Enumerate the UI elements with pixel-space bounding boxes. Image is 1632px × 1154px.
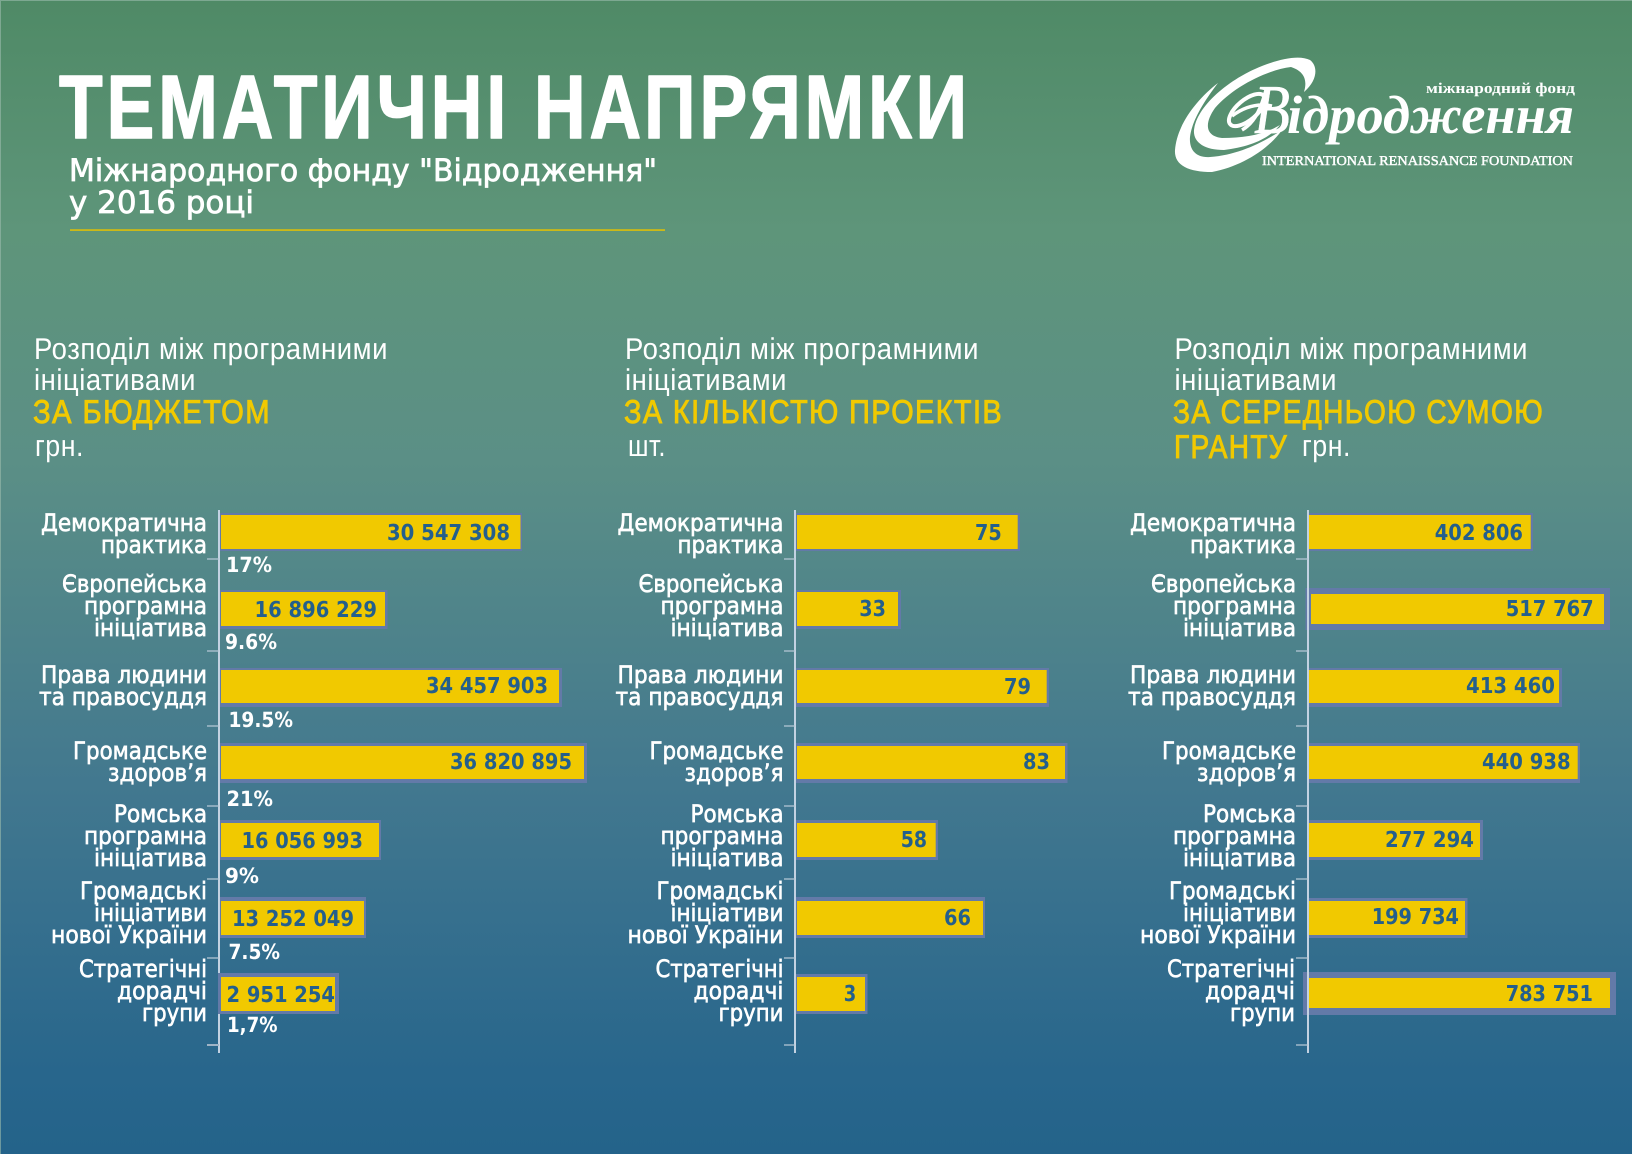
row: Громадські ініціативи нової України: нової України [51,921,207,949]
bar highlight backing: strategic groups [1303,972,1616,1015]
row: Ромська програмна ініціатива: ініціатива [670,844,784,872]
logo: International Renaissance Foundation: ідродження [1287,85,1574,145]
row: Стратегічні дорадчі групи: 3 [844,982,856,1007]
title: ТЕМАТИЧНІ НАПРЯМКИ [59,58,971,158]
row: Демократична практика [1130,509,1533,559]
row: Європейська програмна ініціатива: програмна [1173,592,1296,620]
heading: average grant: ініціативами [1174,364,1337,397]
row: Права людини та правосуддя: та правосуддя [39,683,207,711]
row: Стратегічні дорадчі групи: Стратегічні [656,955,784,983]
row: Громадські ініціативи нової України: ініціативи [94,899,207,927]
row: Європейська програмна ініціатива [638,570,901,642]
row: Ромська програмна ініціатива: 9% [225,864,259,888]
row: Права людини та правосуддя: 34 457 903 [426,674,548,699]
row: Європейська програмна ініціатива: Європейська [1151,570,1296,598]
row: Громадське здоров'я: 83 [1023,750,1050,775]
row: Громадське здоров'я: 21% [226,787,273,811]
row: Ромська програмна ініціатива [1173,800,1483,872]
row: Європейська програмна ініціатива [1151,570,1604,642]
row: Громадське здоров'я [73,737,587,811]
logo: International Renaissance Foundation: міжнародний фонд [1426,81,1575,97]
row: Ромська програмна ініціатива [660,800,938,872]
row: Громадські ініціативи нової України [51,877,366,964]
row: Демократична практика [618,509,1020,559]
row: Європейська програмна ініціатива [62,570,388,654]
panel: project count distribution [616,333,1068,1053]
heading: project count: ЗА КІЛЬКІСТЮ ПРОЕКТІВ [624,393,1003,430]
row: Стратегічні дорадчі групи: Стратегічні [1167,955,1295,983]
logo: International Renaissance Foundation: INTERNATIONAL RENAISSANCE FOUNDATION [1262,153,1573,168]
row: Ромська програмна ініціатива: Ромська [114,800,207,828]
heading: average grant: Розподіл між програмними [1174,333,1528,366]
row: Стратегічні дорадчі групи: дорадчі [694,977,784,1005]
heading: budget: ініціативами [34,364,196,397]
row: Стратегічні дорадчі групи [656,955,868,1027]
row: Демократична практика [41,509,522,577]
row: Громадські ініціативи нової України: 199 734 [1372,905,1459,930]
row: Демократична практика: Демократична [41,509,207,537]
heading: average grant [1173,333,1544,465]
row: Ромська програмна ініціатива: програмна [84,822,207,850]
row: Громадське здоров'я: здоров’я [684,759,784,787]
row: Ромська програмна ініціатива: Ромська [690,800,784,828]
row: Громадське здоров'я [1162,737,1580,787]
row: Демократична практика: 17% [226,553,272,577]
row: Громадське здоров'я [650,737,1068,787]
heading: average grant: грн. [1302,430,1351,463]
heading: budget: ЗА БЮДЖЕТОМ [33,393,271,430]
row: Стратегічні дорадчі групи: 1,7% [227,1013,278,1037]
row: Громадські ініціативи нової України: нової України [628,921,784,949]
row: Громадські ініціативи нової України: Громадські [80,877,207,905]
row: Демократична практика: Демократична [1130,509,1296,537]
row: Громадське здоров'я: 36 820 895 [450,750,572,775]
heading: average grant: ЗА СЕРЕДНЬОЮ СУМОЮ [1173,393,1544,430]
row: Громадські ініціативи нової України [1140,877,1468,949]
row: Громадські ініціативи нової України: 7.5% [228,940,280,964]
row: Права людини та правосуддя [1128,661,1562,711]
row: Європейська програмна ініціатива: 33 [859,597,886,622]
heading: project count: шт. [628,430,666,463]
heading: budget: Розподіл між програмними [34,333,388,366]
row: Демократична практика: практика [1190,531,1296,559]
row: Ромська програмна ініціатива: 58 [901,828,927,853]
row: Стратегічні дорадчі групи [1167,955,1610,1027]
row: Демократична практика: практика [101,531,207,559]
row: Ромська програмна ініціатива [84,800,381,888]
row: Стратегічні дорадчі групи: дорадчі [1205,977,1295,1005]
logo: International Renaissance Foundation: В [1254,72,1290,149]
heading: project count: Розподіл між програмними [625,333,979,366]
row: Демократична практика: 75 [975,521,1002,546]
row: Громадські ініціативи нової України: нової України [1140,921,1296,949]
heading: budget: грн. [35,430,84,463]
row: Європейська програмна ініціатива: 16 896 229 [254,598,377,623]
row: Громадські ініціативи нової України: 66 [944,906,971,931]
subtitle: у 2016 році [69,185,254,221]
row: Громадське здоров'я: Громадське [73,737,207,765]
logo: International Renaissance Foundation [1175,58,1575,172]
row: Права людини та правосуддя [39,661,562,732]
row: Громадські ініціативи нової України: 13 252 049 [232,907,354,932]
chart axis: budget [218,510,220,1053]
heading: average grant: ГРАНТУ [1174,428,1288,465]
row: Права людини та правосуддя: 413 460 [1466,674,1555,699]
row: Громадські ініціативи нової України: ініціативи [670,899,784,927]
row: Демократична практика: Демократична [618,509,784,537]
row: Стратегічні дорадчі групи: Стратегічні [79,955,207,983]
panel: budget distribution [33,333,587,1053]
row: Громадське здоров'я: Громадське [650,737,784,765]
row: Права людини та правосуддя: Права людини [1130,661,1296,689]
row: Європейська програмна ініціатива: Європейська [638,570,784,598]
row: Європейська програмна ініціатива: програмна [660,592,784,620]
row: Права людини та правосуддя: Права людини [41,661,207,689]
row: Європейська програмна ініціатива: ініціатива [670,614,784,642]
heading: project count [624,333,1003,463]
chart axis: average grant [1307,510,1309,1053]
row: Ромська програмна ініціатива: Ромська [1203,800,1296,828]
row: Стратегічні дорадчі групи: 2 951 254 [226,983,335,1008]
row: Права людини та правосуддя: та правосуддя [616,683,784,711]
row: Стратегічні дорадчі групи: дорадчі [117,977,207,1005]
row: Демократична практика: 402 806 [1435,521,1523,546]
row: Європейська програмна ініціатива: програмна [84,592,207,620]
row: Демократична практика: практика [678,531,784,559]
subtitle [69,153,657,221]
row: Громадське здоров'я: здоров’я [1197,759,1296,787]
row: Ромська програмна ініціатива: 277 294 [1385,828,1474,853]
row: Громадське здоров'я: Громадське [1162,737,1296,765]
row: Стратегічні дорадчі групи: групи [142,999,207,1027]
row: Ромська програмна ініціатива: ініціатива [94,844,207,872]
chart axis: project count [794,510,796,1053]
row: Європейська програмна ініціатива: 9.6% [225,630,277,654]
row: Громадські ініціативи нової України [628,877,985,949]
row: Громадське здоров'я: здоров’я [108,759,207,787]
row: Європейська програмна ініціатива: Європейська [62,570,207,598]
row: Стратегічні дорадчі групи [79,955,339,1037]
row: Ромська програмна ініціатива: програмна [660,822,784,850]
row: Європейська програмна ініціатива: ініціатива [94,614,207,642]
row: Стратегічні дорадчі групи: групи [1230,999,1295,1027]
row: Демократична практика: 30 547 308 [387,521,510,546]
row: Ромська програмна ініціатива: 16 056 993 [242,829,363,854]
heading: budget [33,333,388,463]
subtitle: Міжнародного фонду "Відродження" [69,153,657,189]
row: Громадські ініціативи нової України: Громадські [656,877,784,905]
panel: average grant distribution [1128,333,1616,1053]
row: Права людини та правосуддя [616,661,1049,711]
row: Європейська програмна ініціатива: ініціатива [1183,614,1296,642]
heading: project count: ініціативами [625,364,787,397]
row: Права людини та правосуддя: Права людини [618,661,784,689]
row: Права людини та правосуддя: 79 [1004,675,1031,700]
row: Ромська програмна ініціатива: програмна [1173,822,1296,850]
row: Ромська програмна ініціатива: ініціатива [1183,844,1296,872]
row: Громадські ініціативи нової України: Громадські [1169,877,1296,905]
row: Стратегічні дорадчі групи: групи [718,999,784,1027]
row: Європейська програмна ініціатива: 517 767 [1506,597,1594,622]
row: Громадські ініціативи нової України: ініціативи [1183,899,1296,927]
row: Стратегічні дорадчі групи: 783 751 [1506,982,1593,1007]
row: Права людини та правосуддя: та правосуддя [1128,683,1296,711]
row: Громадське здоров'я: 440 938 [1482,750,1571,775]
row: Права людини та правосуддя: 19.5% [228,708,293,732]
bar highlight backing: European programme [1306,588,1610,630]
